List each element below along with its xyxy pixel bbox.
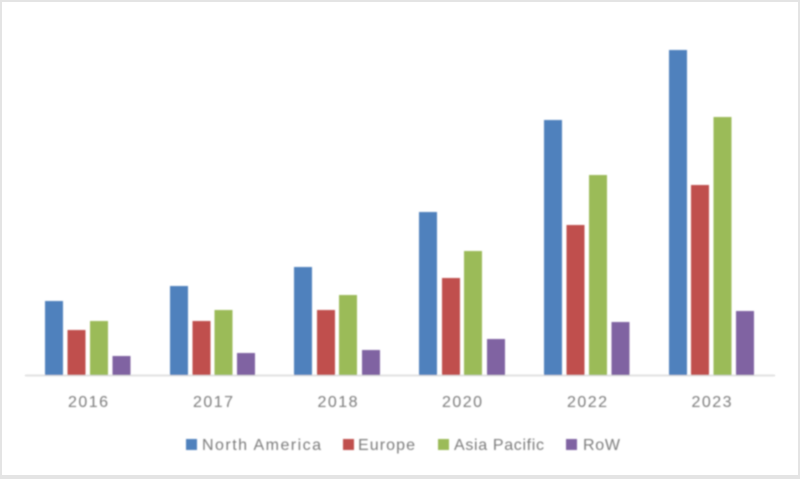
x-axis year labels: 2017 xyxy=(193,394,233,411)
x-axis year labels: 2022 xyxy=(567,394,607,411)
bars: 2016 xyxy=(45,301,130,375)
legend: Europe xyxy=(358,437,415,454)
bars: 2023 xyxy=(669,50,754,375)
x-axis year labels: 2016 xyxy=(68,394,108,411)
x-axis year labels xyxy=(68,394,732,411)
legend: North America xyxy=(202,437,321,454)
legend: RoW xyxy=(583,437,621,454)
x-axis year labels: 2018 xyxy=(318,394,358,411)
x-axis year labels: 2020 xyxy=(442,394,482,411)
legend xyxy=(186,437,621,454)
bars: 2018 xyxy=(294,267,380,375)
bars: 2017 xyxy=(170,286,255,375)
x-axis year labels: 2023 xyxy=(692,394,732,411)
bars: 2020 xyxy=(419,212,505,375)
legend: Asia Pacific xyxy=(454,437,544,454)
bars: 2022 xyxy=(544,120,630,375)
